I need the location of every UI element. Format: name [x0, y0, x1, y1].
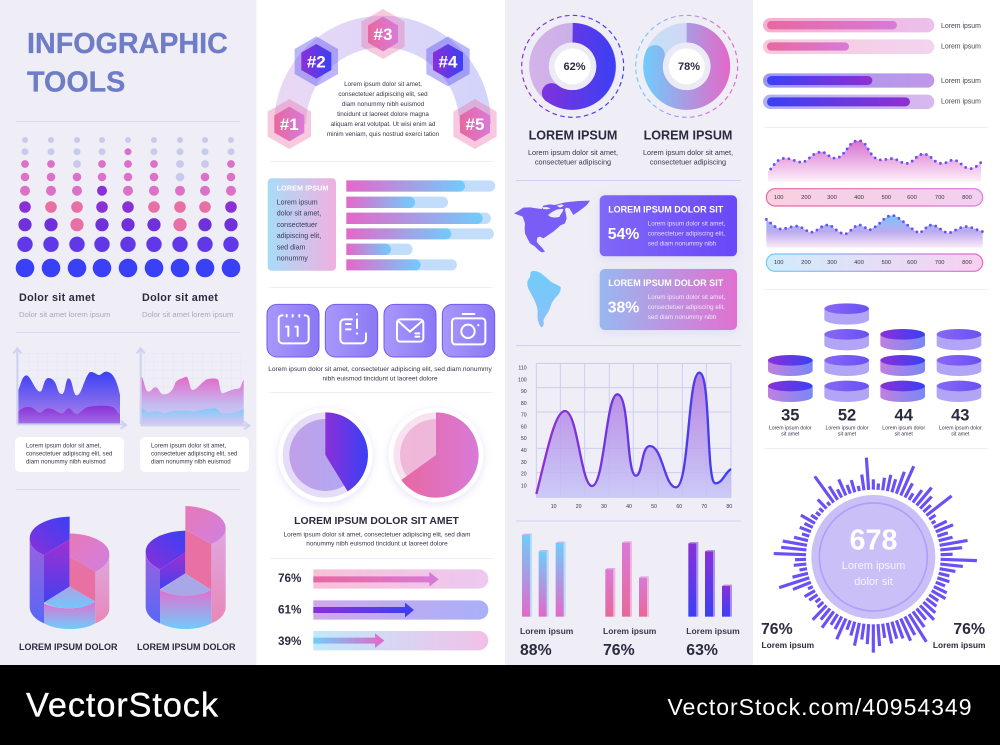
wave chart 1 axis: 100 — [774, 195, 784, 201]
radial gauge text: Lorem ipsum — [842, 560, 905, 572]
hexagon arc steps: aliquam erat volutpat. Ut wisi enim ad — [331, 121, 436, 128]
chart axis labels: 20 — [521, 472, 527, 478]
chart caption cards: Lorem ipsum dolor sit amet, — [26, 442, 101, 450]
text card: Lorem ipsum — [277, 198, 318, 206]
coin chart labels: 35 — [781, 407, 799, 425]
icon row caption: Lorem ipsum dolor sit amet, consectetuer adipiscing elit, sed diam nonummy — [268, 366, 492, 373]
title: INFOGRAPHIC — [27, 28, 228, 60]
callout: 54%: consectetuer adipiscing elit, — [648, 231, 725, 238]
area charts — [13, 348, 249, 429]
hexagon arc steps: minim veniam, quis nostrud exerci tation — [327, 131, 440, 138]
bar chart labels: 63% — [686, 642, 718, 659]
callout: 38%: Lorem ipsum dolor sit amet, — [648, 294, 726, 301]
coin chart labels: sit amet — [838, 432, 857, 438]
dot matrix captions: Dolor sit amet lorem ipsum — [142, 310, 233, 319]
radial left stat — [761, 621, 814, 650]
text card: nonummy — [277, 255, 308, 263]
panel: column 3 background — [505, 0, 753, 665]
donut labels: 62% — [563, 61, 586, 73]
icon row caption — [268, 366, 492, 383]
text card: consectetuer — [277, 221, 318, 229]
donut labels: LOREM IPSUM — [644, 128, 732, 142]
dot matrix captions: Dolor sit amet — [19, 292, 95, 304]
panel: sliders, wave charts, coins, radial column — [761, 18, 988, 653]
coin chart labels: Lorem ipsum dolor — [939, 426, 982, 432]
donut labels: Lorem ipsum dolor sit amet, — [528, 148, 618, 157]
wave chart 1 axis: 500 — [881, 195, 891, 201]
slider labels — [941, 23, 981, 105]
radial right stat: Lorem ipsum — [933, 640, 986, 650]
coin chart labels: sit amet — [895, 432, 913, 438]
wave chart 1 axis: 400 — [854, 195, 864, 201]
horizontal gradient bars — [346, 180, 495, 270]
wave chart 1 axis: 600 — [907, 195, 917, 201]
chart caption cards: diam nonummy nibh euismod — [26, 458, 106, 466]
wave chart 1 axis — [774, 195, 972, 201]
radial burst gauge — [774, 458, 977, 653]
donut labels: 78% — [678, 61, 700, 73]
coin chart labels: sit amet — [781, 432, 800, 438]
icon: note alert — [325, 304, 378, 357]
chart axis labels: 40 — [626, 504, 632, 510]
dot matrix captions: Dolor sit amet — [142, 292, 218, 304]
radial gauge text — [842, 524, 905, 588]
chart axis labels: 70 — [701, 504, 707, 510]
chart axis labels: 100 — [518, 377, 527, 383]
chart axis labels: 30 — [521, 460, 527, 466]
hexagon arc steps: diam nonummy nibh euismod — [342, 101, 425, 108]
callout: 38%: 38% — [608, 300, 639, 317]
title: TOOLS — [27, 66, 125, 98]
chart caption cards: consectetuer adipiscing elit, sed — [151, 451, 237, 458]
callout: 38%: sed diam nonummy nibh — [648, 314, 717, 321]
slider bars — [763, 18, 934, 109]
panel: donuts, maps, charts column — [514, 15, 741, 659]
wave chart 1 axis: 200 — [801, 195, 811, 201]
chart axis labels: 80 — [521, 401, 527, 407]
chart axis labels: 80 — [726, 504, 732, 510]
coin chart labels: 44 — [895, 407, 914, 425]
footer logo: VectorStock — [26, 687, 219, 725]
icon: mail — [384, 304, 436, 357]
wave chart 2 axis — [774, 260, 972, 266]
chart axis labels: 30 — [601, 504, 607, 510]
hexagon arc steps: #3 — [374, 25, 392, 44]
bar chart labels: 76% — [603, 642, 635, 659]
coin chart labels: 43 — [951, 407, 969, 425]
coin chart labels: 52 — [838, 407, 856, 425]
title — [27, 28, 228, 98]
bar chart labels: Lorem ipsum — [603, 626, 657, 636]
arrow bar percentages: 61% — [278, 604, 302, 616]
panel: title and dot matrix column — [13, 28, 249, 652]
radial right stat — [933, 621, 986, 650]
callout: 54%: sed diam nonummy nibh — [648, 241, 717, 248]
wave chart 2 axis: 400 — [854, 260, 864, 266]
map: North America — [514, 201, 590, 252]
3D cylinder pie 1 — [30, 517, 109, 629]
slider labels: Lorem ipsum — [941, 23, 981, 30]
radial gauge text: dolor sit — [854, 576, 893, 588]
wave chart 1 axis: 300 — [827, 195, 837, 201]
text card — [268, 178, 336, 271]
donut labels: LOREM IPSUM — [529, 128, 617, 142]
cylinder captions — [19, 642, 236, 652]
chart axis labels: 60 — [521, 424, 527, 430]
panel: column 1 background — [0, 0, 256, 665]
donut labels: consectetuer adipiscing — [650, 158, 726, 166]
icon: calendar — [267, 304, 319, 357]
hexagon arc steps — [268, 9, 497, 149]
stacked coin chart — [768, 303, 981, 402]
donut charts — [522, 15, 738, 117]
chart axis labels: 60 — [676, 504, 682, 510]
arrow bar percentages: 39% — [278, 635, 302, 648]
chart axis labels: 90 — [521, 389, 527, 395]
hexagon arc steps: #1 — [280, 115, 299, 134]
chart axis labels: 50 — [521, 436, 527, 442]
chart axis labels: 10 — [521, 484, 527, 490]
coin chart labels: sit amet — [951, 432, 970, 438]
hexagon arc steps: Lorem ipsum dolor sit amet, — [344, 81, 422, 88]
chart caption cards: consectetuer adipiscing elit, sed — [26, 451, 112, 458]
text card: adipiscing elit, — [277, 232, 321, 240]
radial right stat: 76% — [953, 621, 985, 638]
cylinder captions: LOREM IPSUM DOLOR — [137, 642, 236, 652]
dot matrix chart — [16, 137, 240, 277]
text card: dolor sit amet, — [277, 210, 321, 218]
wave chart 2 axis: 700 — [935, 260, 945, 266]
dot matrix captions: Dolor sit amet lorem ipsum — [19, 310, 110, 319]
bar charts — [522, 534, 732, 617]
coin chart labels: Lorem ipsum dolor — [826, 426, 869, 432]
bar chart labels: Lorem ipsum — [686, 626, 740, 636]
pie heading: LOREM IPSUM DOLOR SIT AMET — [294, 516, 460, 527]
wave chart 2 axis: 300 — [827, 260, 837, 266]
slider labels: Lorem ipsum — [941, 98, 981, 106]
footer band — [0, 665, 1000, 745]
icon: camera — [442, 304, 495, 357]
bar chart labels — [520, 626, 740, 659]
dot matrix captions — [19, 292, 233, 319]
chart axis labels: 20 — [576, 504, 582, 510]
text card: LOREM IPSUM — [277, 184, 329, 193]
callout: 38% — [600, 269, 737, 330]
footer id: VectorStock.com/40954349 — [668, 694, 972, 720]
callout: 38%: LOREM IPSUM DOLOR SIT — [608, 278, 724, 288]
chart axis labels: 10 — [551, 504, 557, 510]
chart axis labels: 110 — [518, 366, 527, 372]
callout: 54% — [600, 195, 737, 256]
coin chart labels: Lorem ipsum dolor — [769, 426, 812, 432]
arrow bar percentages — [278, 572, 302, 648]
callout: 54%: 54% — [608, 226, 639, 243]
chart caption cards: diam nonummy nibh euismod — [151, 458, 231, 466]
chart caption cards: Lorem ipsum dolor sit amet, — [151, 442, 226, 450]
hexagon arc steps: #2 — [307, 52, 326, 71]
callout: 54%: LOREM IPSUM DOLOR SIT — [608, 205, 724, 215]
radial gauge text: 678 — [849, 524, 898, 556]
chart axis labels: 40 — [521, 448, 527, 454]
radial left stat: Lorem ipsum — [762, 640, 814, 650]
3D cylinder pie 2 — [146, 506, 226, 629]
wave chart 2 axis: 500 — [881, 260, 891, 266]
slider labels: Lorem ipsum — [941, 78, 981, 85]
pie caption — [284, 531, 470, 547]
wave chart 2 axis: 800 — [962, 260, 972, 266]
hexagon arc steps: consectetuer adipiscing elit, sed — [338, 91, 428, 98]
callout: 54%: Lorem ipsum dolor sit amet, — [648, 221, 726, 228]
arrow progress bars — [313, 569, 488, 650]
wave chart 2 axis: 100 — [774, 260, 784, 266]
bar chart labels: 88% — [520, 642, 552, 659]
wave chart 1 axis: 800 — [962, 195, 972, 201]
bar chart labels: Lorem ipsum — [520, 626, 574, 636]
chart axis labels: 70 — [521, 412, 527, 418]
map: South America — [527, 271, 561, 327]
dotted wave chart 2 — [766, 216, 983, 271]
wave chart 1 axis: 700 — [935, 195, 945, 201]
radial left stat: 76% — [761, 621, 793, 638]
slider labels: Lorem ipsum — [941, 44, 981, 50]
arrow bar percentages: 76% — [278, 572, 302, 585]
text card: sed diam — [277, 243, 306, 251]
pie caption: Lorem ipsum dolor sit amet, consectetuer adipiscing elit, sed diam — [284, 531, 470, 538]
pie charts — [278, 408, 483, 502]
cylinder captions: LOREM IPSUM DOLOR — [19, 642, 118, 652]
line area chart — [536, 363, 731, 497]
panel: hexagon, bars, icons, pies column — [267, 9, 497, 650]
donut labels — [528, 61, 733, 166]
wave chart 2 axis: 200 — [801, 260, 811, 266]
coin chart labels: Lorem ipsum dolor — [882, 426, 925, 432]
hexagon arc steps: #5 — [466, 115, 484, 134]
hexagon arc steps: tincidunt ut laoreet dolore magna — [337, 111, 429, 118]
icon row caption: nibh euismod tincidunt ut laoreet dolore — [322, 376, 438, 383]
coin chart labels — [769, 407, 982, 438]
donut labels: consectetuer adipiscing — [535, 158, 611, 166]
dotted wave chart 1 — [766, 141, 983, 206]
icon row — [267, 304, 495, 357]
chart axis labels — [518, 366, 732, 510]
callout: 38%: consectetuer adipiscing elit, — [648, 304, 725, 311]
chart caption cards — [15, 437, 249, 472]
chart axis labels: 50 — [651, 504, 657, 510]
pie caption: nonummy nibh euismod tincidunt ut laoreet dolore — [306, 540, 448, 547]
wave chart 2 axis: 600 — [907, 260, 917, 266]
hexagon arc steps: #4 — [439, 52, 458, 71]
donut labels: Lorem ipsum dolor sit amet, — [643, 148, 733, 157]
